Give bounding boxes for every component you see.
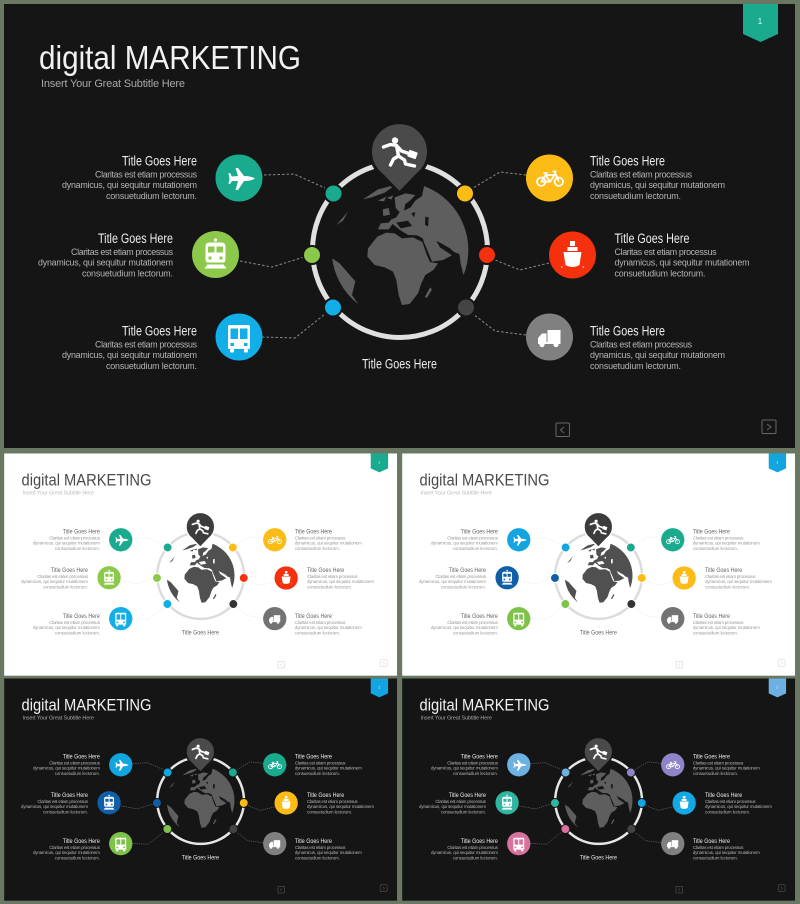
- text block: left bottom: dynamicus, qui sequitur mutationem: [62, 350, 197, 360]
- text block: left bottom: dynamicus, qui sequitur mutationem: [33, 625, 100, 630]
- text block: right middle: Title Goes Here: [705, 792, 742, 799]
- ring dots: [550, 768, 646, 833]
- nav: next: [380, 885, 387, 892]
- subtitle: Insert Your Great Subtitle Here: [23, 716, 94, 722]
- nav: next: [762, 420, 776, 434]
- text block: left top: Title Goes Here: [461, 754, 498, 761]
- icon: bus: [507, 607, 530, 630]
- text block: left bottom: consuetudium lectorum.: [453, 631, 498, 636]
- center caption: Title Goes Here: [580, 854, 617, 861]
- text block: right bottom: [693, 613, 760, 636]
- ring: [157, 757, 244, 844]
- text block: right middle: dynamicus, qui sequitur mutationem: [307, 804, 374, 809]
- subtitle: Insert Your Great Subtitle Here: [41, 78, 185, 90]
- connector lines: [121, 762, 275, 844]
- text block: right top: Title Goes Here: [693, 754, 730, 761]
- text block: right middle: [705, 792, 772, 815]
- text block: left bottom: Claritas est etiam processus: [49, 845, 101, 850]
- text block: right middle: dynamicus, qui sequitur mutationem: [705, 804, 772, 809]
- text block: right middle: Claritas est etiam processus: [705, 799, 756, 804]
- text block: left middle: dynamicus, qui sequitur mutationem: [21, 804, 88, 809]
- panel: dark slide, pastel palette: [402, 678, 795, 901]
- text block: left bottom: dynamicus, qui sequitur mutationem: [431, 850, 498, 855]
- panel: main dark slide: [4, 4, 795, 448]
- text block: right top: consuetudium lectorum.: [295, 771, 340, 776]
- icon: bus: [109, 832, 132, 855]
- text block: right middle: consuetudium lectorum.: [307, 810, 352, 815]
- text block: left middle: Claritas est etiam processus: [435, 574, 487, 579]
- ring dots: [152, 768, 248, 833]
- tab: page number: 1: [758, 17, 763, 26]
- text block: left middle: dynamicus, qui sequitur mutationem: [21, 579, 88, 584]
- nav: next: [778, 660, 785, 667]
- text block: left bottom: Title Goes Here: [63, 838, 100, 845]
- text block: left top: Claritas est etiam processus: [447, 761, 499, 766]
- text block: left bottom: consuetudium lectorum.: [453, 856, 498, 861]
- text block: left top: Claritas est etiam processus: [95, 170, 198, 180]
- icon: train: [495, 566, 519, 589]
- text block: left bottom: Claritas est etiam processus: [447, 845, 499, 850]
- text block: left top: consuetudium lectorum.: [106, 191, 197, 201]
- icon: bike: [263, 528, 286, 551]
- text block: left top: consuetudium lectorum.: [453, 771, 498, 776]
- text block: left bottom: [62, 324, 198, 371]
- text block: left bottom: dynamicus, qui sequitur mutationem: [33, 850, 100, 855]
- icon: ship: [673, 566, 696, 590]
- text block: left bottom: Title Goes Here: [461, 613, 498, 620]
- text block: left top: [431, 754, 499, 776]
- pin with runner icon: [584, 737, 613, 772]
- ring dots: [303, 184, 496, 316]
- icon: ship: [673, 791, 696, 815]
- text block: right middle: [705, 567, 772, 590]
- icon: bike: [661, 753, 684, 776]
- text block: left bottom: [431, 838, 499, 861]
- nav: previous: [278, 661, 285, 668]
- text block: left bottom: Title Goes Here: [122, 324, 197, 338]
- text block: right middle: consuetudium lectorum.: [614, 268, 706, 278]
- subtitle: Insert Your Great Subtitle Here: [23, 491, 94, 497]
- text block: left top: [62, 154, 198, 201]
- text block: right middle: consuetudium lectorum.: [705, 585, 750, 590]
- text block: right bottom: consuetudium lectorum.: [693, 856, 738, 861]
- text block: left middle: Title Goes Here: [449, 567, 486, 574]
- text block: right top: [295, 529, 362, 551]
- tab: page number: 1: [378, 684, 380, 689]
- text block: left middle: Claritas est etiam processus: [37, 574, 89, 579]
- subtitle: Insert Your Great Subtitle Here: [421, 491, 492, 497]
- icon: truck: [661, 832, 684, 855]
- text block: right bottom: Claritas est etiam processus: [590, 340, 693, 350]
- text block: left bottom: dynamicus, qui sequitur mutationem: [431, 625, 498, 630]
- tab: page number: [743, 4, 778, 42]
- ring: [312, 162, 488, 338]
- text block: right top: consuetudium lectorum.: [693, 546, 738, 551]
- text block: left bottom: consuetudium lectorum.: [55, 631, 100, 636]
- text block: right middle: Title Goes Here: [307, 792, 344, 799]
- text block: left top: dynamicus, qui sequitur mutationem: [431, 541, 498, 546]
- title: digital MARKETING: [420, 696, 549, 715]
- panel: dark slide, blue palette: [4, 678, 397, 901]
- center caption: Title Goes Here: [182, 629, 219, 636]
- text block: right top: Claritas est etiam processus: [295, 536, 346, 541]
- globe: [328, 183, 470, 317]
- text block: right top: Claritas est etiam processus: [590, 170, 693, 180]
- text block: right bottom: consuetudium lectorum.: [693, 631, 738, 636]
- text block: right top: [590, 154, 725, 201]
- nav: next: [778, 885, 785, 892]
- text block: right middle: Title Goes Here: [614, 231, 690, 246]
- text block: right top: Title Goes Here: [295, 529, 332, 536]
- icon: bus: [216, 314, 262, 360]
- text block: left bottom: Claritas est etiam processus: [447, 620, 499, 625]
- globe: [563, 767, 633, 834]
- text block: left top: [33, 529, 101, 551]
- text block: right top: Title Goes Here: [590, 154, 665, 168]
- center caption: Title Goes Here: [580, 629, 617, 636]
- text block: right top: dynamicus, qui sequitur mutationem: [693, 541, 760, 546]
- text block: right bottom: Title Goes Here: [295, 613, 332, 620]
- center caption: Title Goes Here: [362, 356, 437, 372]
- text block: right bottom: consuetudium lectorum.: [295, 631, 340, 636]
- text block: right middle: Claritas est etiam processus: [307, 799, 358, 804]
- text block: right top: Title Goes Here: [693, 529, 730, 536]
- ring: [555, 532, 642, 619]
- text block: right bottom: [590, 324, 725, 371]
- text block: right middle: Claritas est etiam processus: [705, 574, 756, 579]
- center caption: Title Goes Here: [182, 854, 219, 861]
- text block: right bottom: dynamicus, qui sequitur mutationem: [590, 350, 725, 360]
- text block: right middle: consuetudium lectorum.: [307, 585, 352, 590]
- tab: page number: 1: [776, 459, 778, 464]
- text block: right bottom: [295, 613, 362, 636]
- icon: ship: [275, 791, 298, 815]
- tab: page number: 1: [776, 684, 778, 689]
- icon: train: [495, 791, 519, 814]
- text block: left top: consuetudium lectorum.: [453, 546, 498, 551]
- icon: truck: [263, 607, 286, 630]
- text block: left bottom: consuetudium lectorum.: [106, 361, 197, 371]
- ring: [555, 757, 642, 844]
- text block: left top: Claritas est etiam processus: [49, 761, 101, 766]
- text block: left bottom: Title Goes Here: [63, 613, 100, 620]
- nav: previous: [676, 661, 683, 668]
- icon: bike: [263, 753, 286, 776]
- text block: left middle: dynamicus, qui sequitur mutationem: [38, 258, 173, 268]
- title: digital MARKETING: [39, 40, 301, 77]
- text block: left bottom: Claritas est etiam processus: [49, 620, 101, 625]
- text block: left top: Title Goes Here: [63, 754, 100, 761]
- icon: truck: [526, 314, 573, 360]
- text block: right top: Title Goes Here: [295, 754, 332, 761]
- connector lines: [519, 537, 673, 619]
- text block: left middle: Title Goes Here: [51, 792, 88, 799]
- icon: bus: [507, 832, 530, 855]
- panel: white slide, original palette: [4, 453, 397, 676]
- text block: right middle: dynamicus, qui sequitur mutationem: [614, 258, 750, 268]
- text block: left bottom: [431, 613, 499, 636]
- text block: right middle: Claritas est etiam processus: [614, 247, 717, 257]
- text block: right middle: Claritas est etiam processus: [307, 574, 358, 579]
- text block: right bottom: Title Goes Here: [590, 324, 665, 338]
- text block: left middle: Claritas est etiam processus: [435, 799, 487, 804]
- tab: page number: 1: [378, 459, 380, 464]
- text block: left bottom: Claritas est etiam processus: [95, 340, 198, 350]
- text block: left top: [33, 754, 101, 776]
- text block: left middle: dynamicus, qui sequitur mutationem: [419, 579, 486, 584]
- text block: left middle: consuetudium lectorum.: [441, 810, 486, 815]
- icon: plane: [507, 753, 530, 776]
- icon: truck: [661, 607, 684, 630]
- connector lines: [121, 537, 275, 619]
- icon: train: [97, 566, 121, 589]
- text block: right top: dynamicus, qui sequitur mutationem: [295, 766, 362, 771]
- text block: left top: Title Goes Here: [63, 529, 100, 536]
- title: digital MARKETING: [22, 696, 151, 715]
- text block: right middle: [307, 567, 374, 590]
- text block: left middle: consuetudium lectorum.: [441, 585, 486, 590]
- text block: right bottom: [295, 838, 362, 861]
- text block: left bottom: [33, 613, 101, 636]
- text block: left top: dynamicus, qui sequitur mutationem: [431, 766, 498, 771]
- text block: left middle: Claritas est etiam processus: [71, 247, 174, 257]
- text block: left middle: consuetudium lectorum.: [43, 810, 88, 815]
- text block: left top: consuetudium lectorum.: [55, 546, 100, 551]
- text block: left middle: Claritas est etiam processus: [37, 799, 89, 804]
- connector lines: [240, 172, 549, 338]
- icon: bus: [109, 607, 132, 630]
- text block: left middle: Title Goes Here: [98, 231, 173, 246]
- text block: left middle: dynamicus, qui sequitur mutationem: [419, 804, 486, 809]
- text block: left top: dynamicus, qui sequitur mutationem: [62, 180, 197, 190]
- text block: left bottom: [33, 838, 101, 861]
- text block: left top: consuetudium lectorum.: [55, 771, 100, 776]
- tab: page number: [769, 678, 786, 697]
- text block: left top: dynamicus, qui sequitur mutationem: [33, 766, 100, 771]
- text block: right bottom: dynamicus, qui sequitur mutationem: [693, 850, 760, 855]
- text block: left middle: Title Goes Here: [449, 792, 486, 799]
- text block: left middle: consuetudium lectorum.: [82, 268, 173, 278]
- text block: right bottom: consuetudium lectorum.: [590, 361, 681, 371]
- icon: truck: [263, 832, 286, 855]
- text block: left top: Claritas est etiam processus: [49, 536, 101, 541]
- icon: train: [97, 791, 121, 814]
- text block: right middle: [307, 792, 374, 815]
- icon: ship: [275, 566, 298, 590]
- tab: page number: [371, 678, 388, 697]
- pin with runner icon: [186, 737, 215, 772]
- pin with runner icon: [186, 512, 215, 547]
- text block: right middle: dynamicus, qui sequitur mutationem: [307, 579, 374, 584]
- tab: page number: [371, 453, 388, 472]
- ring dots: [550, 543, 646, 608]
- text block: right bottom: dynamicus, qui sequitur mutationem: [295, 625, 362, 630]
- text block: right middle: Title Goes Here: [307, 567, 344, 574]
- text block: left bottom: Title Goes Here: [461, 838, 498, 845]
- text block: left middle: [21, 567, 89, 590]
- ring: [157, 532, 244, 619]
- text block: right top: dynamicus, qui sequitur mutationem: [693, 766, 760, 771]
- icon: bike: [526, 154, 573, 202]
- pin with runner icon: [370, 123, 429, 193]
- nav: next: [380, 660, 387, 667]
- text block: left top: dynamicus, qui sequitur mutationem: [33, 541, 100, 546]
- icon: plane: [507, 528, 530, 551]
- text block: right top: dynamicus, qui sequitur mutationem: [295, 541, 362, 546]
- text block: right bottom: Title Goes Here: [693, 613, 730, 620]
- text block: right top: Claritas est etiam processus: [295, 761, 346, 766]
- text block: left top: Title Goes Here: [122, 154, 197, 168]
- text block: right top: [693, 754, 760, 776]
- text block: left middle: Title Goes Here: [51, 567, 88, 574]
- text block: right middle: [614, 231, 750, 278]
- text block: right bottom: Claritas est etiam processus: [295, 845, 346, 850]
- panel: white slide, blue palette: [402, 453, 795, 676]
- nav: previous: [278, 886, 285, 893]
- icon: ship: [549, 232, 596, 278]
- text block: right top: consuetudium lectorum.: [295, 546, 340, 551]
- connector lines: [519, 762, 673, 844]
- text block: right top: consuetudium lectorum.: [693, 771, 738, 776]
- text block: right bottom: Claritas est etiam processus: [693, 620, 744, 625]
- globe: [165, 767, 235, 834]
- text block: right bottom: consuetudium lectorum.: [295, 856, 340, 861]
- text block: right bottom: Title Goes Here: [693, 838, 730, 845]
- text block: right bottom: [693, 838, 760, 861]
- tab: page number: [769, 453, 786, 472]
- title: digital MARKETING: [22, 471, 151, 490]
- text block: right bottom: dynamicus, qui sequitur mutationem: [295, 850, 362, 855]
- icon: train: [192, 231, 239, 278]
- text block: left top: Claritas est etiam processus: [447, 536, 499, 541]
- globe: [165, 542, 235, 609]
- text block: right middle: dynamicus, qui sequitur mutationem: [705, 579, 772, 584]
- ring dots: [152, 543, 248, 608]
- text block: left bottom: consuetudium lectorum.: [55, 856, 100, 861]
- text block: right bottom: Claritas est etiam processus: [693, 845, 744, 850]
- text block: left middle: [38, 231, 174, 278]
- text block: left top: [431, 529, 499, 551]
- text block: left top: Title Goes Here: [461, 529, 498, 536]
- icon: bike: [661, 528, 684, 551]
- text block: left middle: [21, 792, 89, 815]
- text block: right bottom: dynamicus, qui sequitur mutationem: [693, 625, 760, 630]
- subtitle: Insert Your Great Subtitle Here: [421, 716, 492, 722]
- text block: right middle: Title Goes Here: [705, 567, 742, 574]
- text block: right middle: consuetudium lectorum.: [705, 810, 750, 815]
- text block: right top: [693, 529, 760, 551]
- nav: previous: [556, 423, 570, 436]
- text block: left middle: [419, 792, 487, 815]
- text block: right top: Claritas est etiam processus: [693, 536, 744, 541]
- icon: plane: [216, 154, 262, 202]
- text block: right top: Claritas est etiam processus: [693, 761, 744, 766]
- nav: previous: [676, 886, 683, 893]
- pin with runner icon: [584, 512, 613, 547]
- globe: [563, 542, 633, 609]
- text block: left middle: [419, 567, 487, 590]
- text block: right top: [295, 754, 362, 776]
- text block: right top: consuetudium lectorum.: [590, 191, 681, 201]
- text block: right top: dynamicus, qui sequitur mutationem: [590, 180, 725, 190]
- title: digital MARKETING: [420, 471, 549, 490]
- icon: plane: [109, 528, 132, 551]
- icon: plane: [109, 753, 132, 776]
- text block: right bottom: Title Goes Here: [295, 838, 332, 845]
- text block: right bottom: Claritas est etiam processus: [295, 620, 346, 625]
- text block: left middle: consuetudium lectorum.: [43, 585, 88, 590]
